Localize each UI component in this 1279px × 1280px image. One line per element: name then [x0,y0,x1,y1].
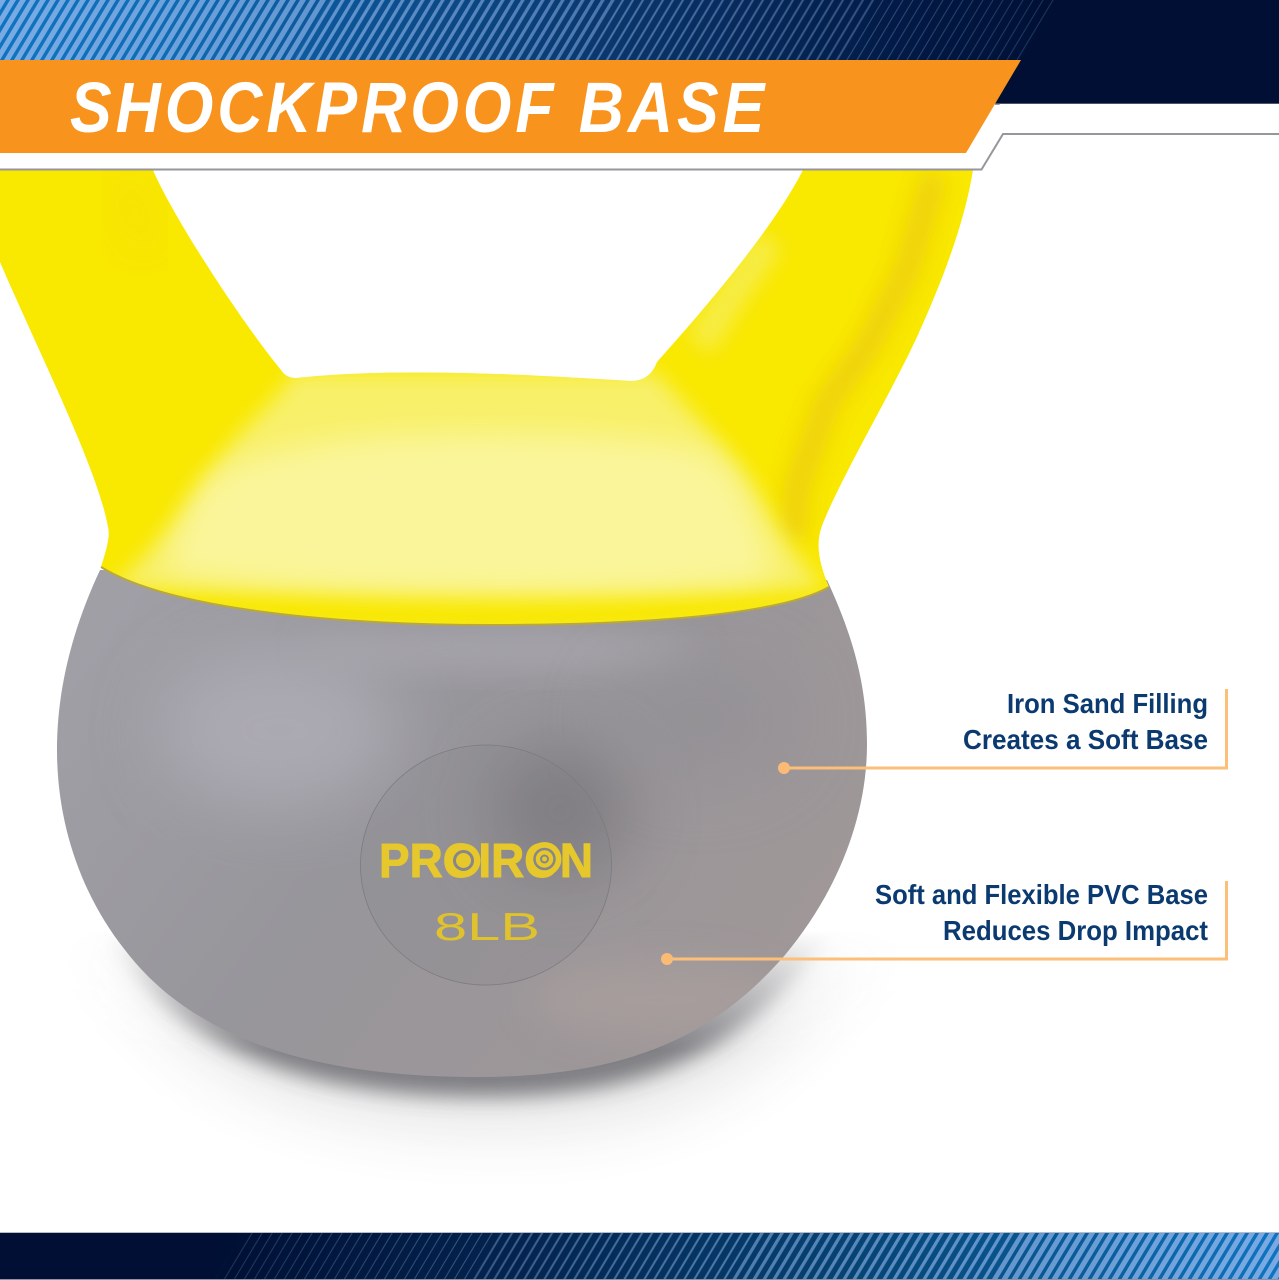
callout text: Soft and Flexible PVC Base [875,879,1208,910]
callout text: Reduces Drop Impact [943,915,1208,946]
kettlebell base: grey PVC ball [40,560,880,1090]
leader line [778,689,1226,774]
title: SHOCKPROOF BASE [70,68,767,148]
label circle with logo [360,745,612,985]
leader line [661,881,1226,965]
footer band [0,1232,1279,1280]
callout: PVC base [661,879,1226,965]
title banner [0,60,1021,153]
callout text: Creates a Soft Base [963,724,1208,755]
header band: navy and striped blue gradient [0,0,1279,105]
callout text [875,879,1208,946]
white strip under banner covering handle tops [0,104,1279,170]
kettlebell handle and yellow body [0,165,990,640]
weight text: 8LB [434,906,540,949]
ground shadow under kettlebell [115,938,822,1143]
callout: iron sand filling [778,688,1226,774]
logo text: PROIRON [379,835,593,888]
callout text [963,688,1208,755]
callout text: Iron Sand Filling [1007,688,1208,719]
